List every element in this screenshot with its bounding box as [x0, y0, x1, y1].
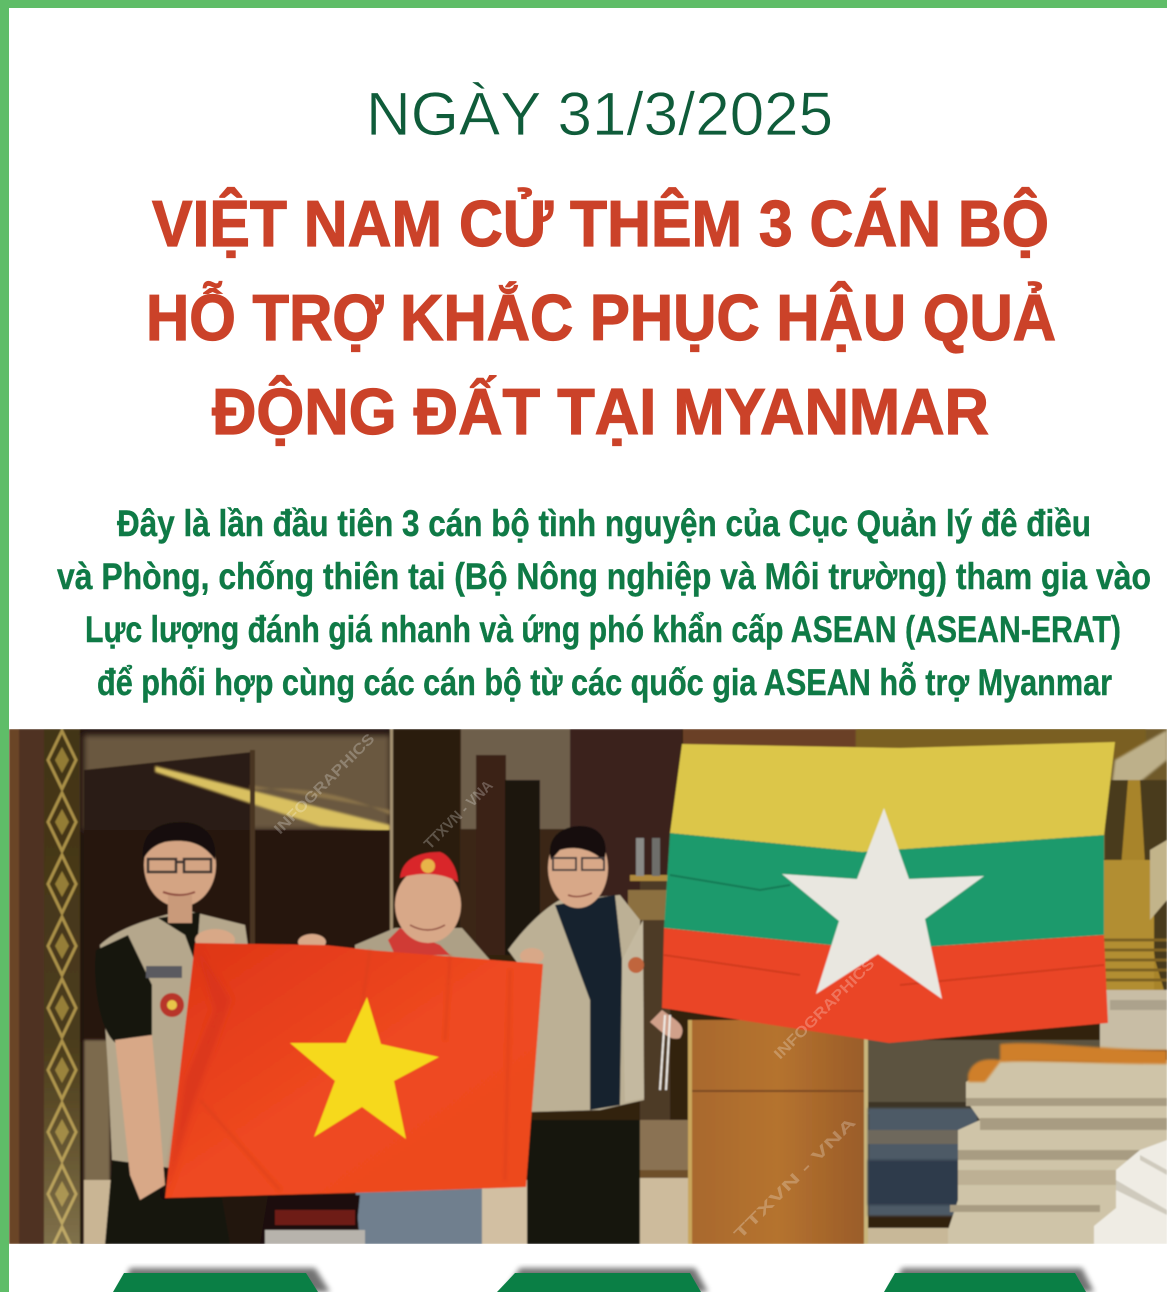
- yellow star: [290, 997, 439, 1139]
- pagoda decoration right: [856, 729, 1167, 1244]
- watermarks: TTXVN - VNA: [731, 1114, 860, 1243]
- white star: [782, 808, 984, 999]
- marigold garland: [968, 1043, 1167, 1082]
- title: [146, 187, 1056, 448]
- trophy shelf: [630, 875, 680, 881]
- person: right officer: [508, 826, 682, 1244]
- tab 3: [884, 1273, 1086, 1292]
- white steps foreground: [1094, 1140, 1167, 1244]
- watermarks: INFOGRAPHICS: [771, 955, 878, 1063]
- watermarks: INFOGRAPHICS: [271, 730, 378, 838]
- person: centre officer: [260, 852, 490, 1244]
- title: HỖ TRỢ KHẮC PHỤC HẬU QUẢ: [146, 281, 1056, 354]
- wood panel: [682, 729, 856, 748]
- person: left officer: [95, 822, 250, 1244]
- Vietnam flag: [165, 943, 543, 1198]
- title: ĐỘNG ĐẤT TẠI MYANMAR: [212, 375, 989, 448]
- intro text block: [57, 503, 1151, 703]
- watermarks: TTXVN - VNA: [421, 777, 497, 853]
- Myanmar flag: [662, 742, 1115, 1043]
- tab 1: [113, 1273, 318, 1292]
- title: VIỆT NAM CỬ THÊM 3 CÁN BỘ: [152, 187, 1049, 260]
- date heading: NGÀY 31/3/2025: [366, 80, 833, 148]
- tab 2: [497, 1273, 701, 1292]
- white stupa: [948, 1060, 1167, 1244]
- bottom tabs: [113, 1268, 1094, 1292]
- interior background: [9, 729, 1167, 1244]
- watermarks: [271, 730, 878, 1243]
- photo: officers with flags: [9, 729, 1167, 1244]
